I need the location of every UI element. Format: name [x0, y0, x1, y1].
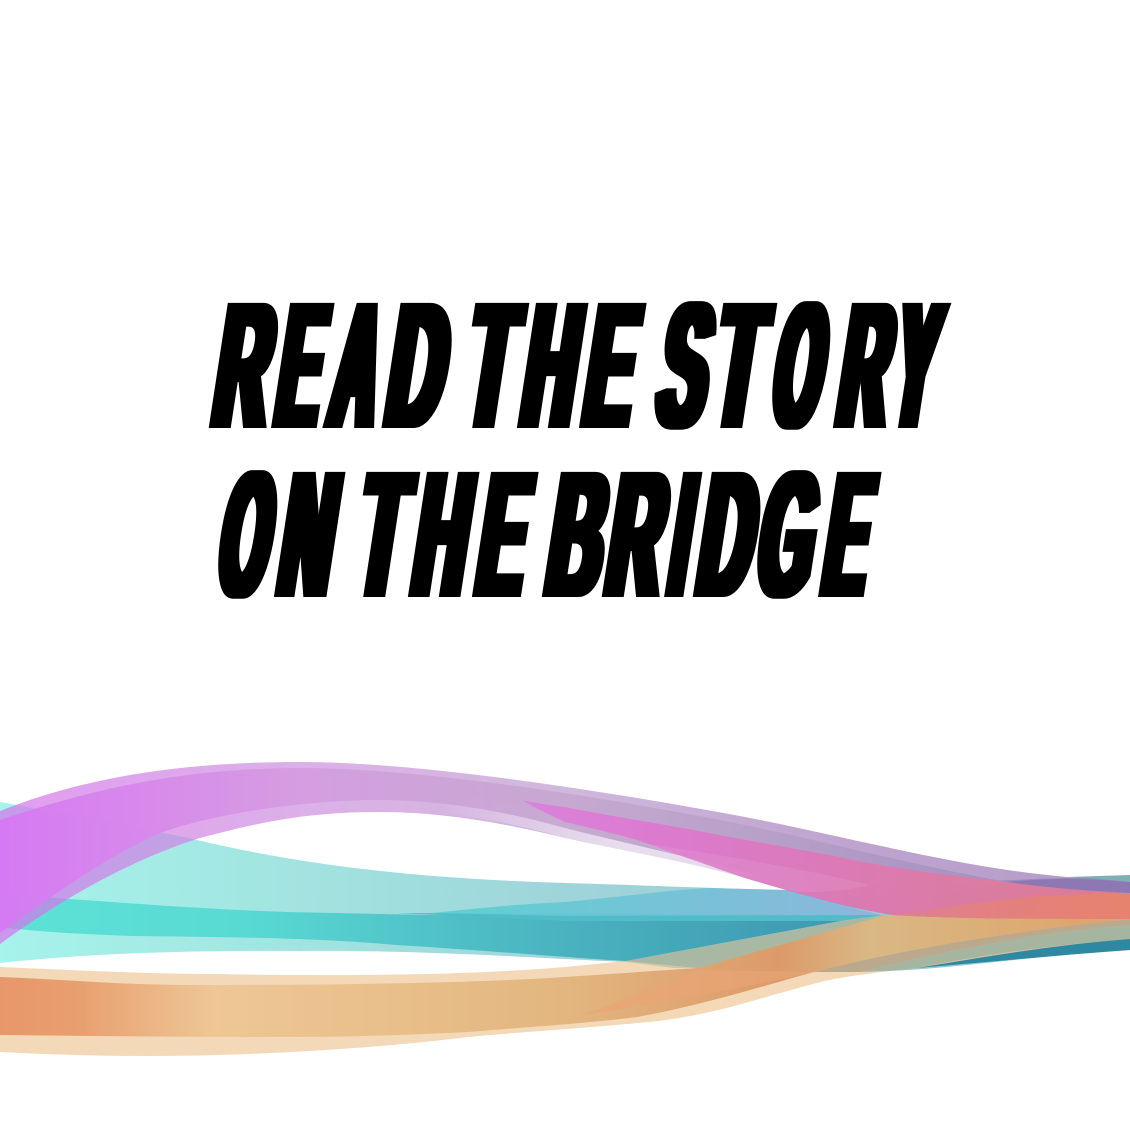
- line one: read the story: R: [829, 267, 906, 464]
- teal ribbon: [0, 802, 1130, 971]
- line one: read the story: O: [763, 267, 839, 464]
- line one: read the story: D: [377, 267, 462, 464]
- line two: on the bridge: O: [209, 436, 287, 633]
- line two: on the bridge: B: [537, 436, 620, 633]
- line one: read the story: E: [267, 267, 338, 464]
- flowing ribbons: [0, 762, 1130, 1056]
- line two: on the bridge: G: [748, 436, 830, 633]
- line two: on the bridge: T: [347, 436, 421, 633]
- line two: on the bridge: R: [597, 436, 679, 633]
- line two: on the bridge: D: [688, 436, 770, 633]
- title: read the story on the bridge: E: [814, 436, 885, 633]
- orange ribbon: [0, 915, 1130, 1056]
- line two: on the bridge: I: [661, 436, 706, 633]
- text: Y: [883, 267, 952, 464]
- line one: read the story: T: [456, 267, 530, 464]
- title: read the story on the bridge: [204, 267, 952, 633]
- line two: on the bridge: N: [270, 436, 350, 633]
- line two: on the bridge: H: [404, 436, 484, 633]
- purple ribbon: [0, 762, 1130, 944]
- line one: read the story: A: [321, 267, 394, 464]
- sage overlap bands: [626, 915, 1130, 972]
- line one: read the story: R: [204, 267, 286, 464]
- line two: on the bridge: E: [468, 436, 542, 633]
- line one: read the story: T: [704, 267, 778, 464]
- line one: read the story: S: [648, 267, 725, 464]
- line one: read the story: E: [575, 267, 650, 464]
- line one: read the story: H: [513, 267, 593, 464]
- line one: read the story: [204, 267, 952, 464]
- line two: on the bridge: [209, 436, 885, 633]
